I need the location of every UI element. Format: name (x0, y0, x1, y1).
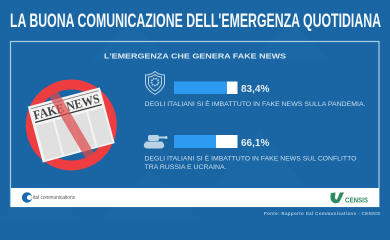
panel: main frame (10, 42, 379, 206)
description: pandemic: DEGLI ITALIANI SI È IMBATTUTO IN FAKE NEWS SULLA PANDEMIA. (144, 99, 366, 108)
description: war: TRA RUSSIA E UCRAINA. (144, 164, 227, 171)
logo strip (11, 188, 379, 207)
logo: ital communications: ital communications (33, 195, 75, 201)
icon: virus shield (146, 72, 164, 94)
bar: 66,1% (174, 135, 238, 148)
description: war: DEGLI ITALIANI SI È IMBATTUTO IN FAKE NEWS SUL CONFLITTO (144, 154, 357, 162)
logo: censis: CENSIS (345, 196, 368, 204)
prohibition bar (54, 94, 90, 156)
panel heading: L'EMERGENZA CHE GENERA FAKE NEWS (104, 52, 286, 60)
value: 83,4%: 83,4% (241, 84, 269, 95)
source note: Fonte: Rapporto Ital Communications - CENSIS (264, 211, 380, 216)
value: 66,1%: 66,1% (241, 138, 269, 149)
icon: prohibited fake news newspaper (28, 84, 115, 166)
logo: ital communications (22, 192, 75, 203)
bar: 83,4% (174, 82, 238, 94)
logo: censis (330, 192, 368, 204)
newspaper: FAKE NEWS (32, 91, 101, 123)
icon: tank (144, 135, 168, 148)
